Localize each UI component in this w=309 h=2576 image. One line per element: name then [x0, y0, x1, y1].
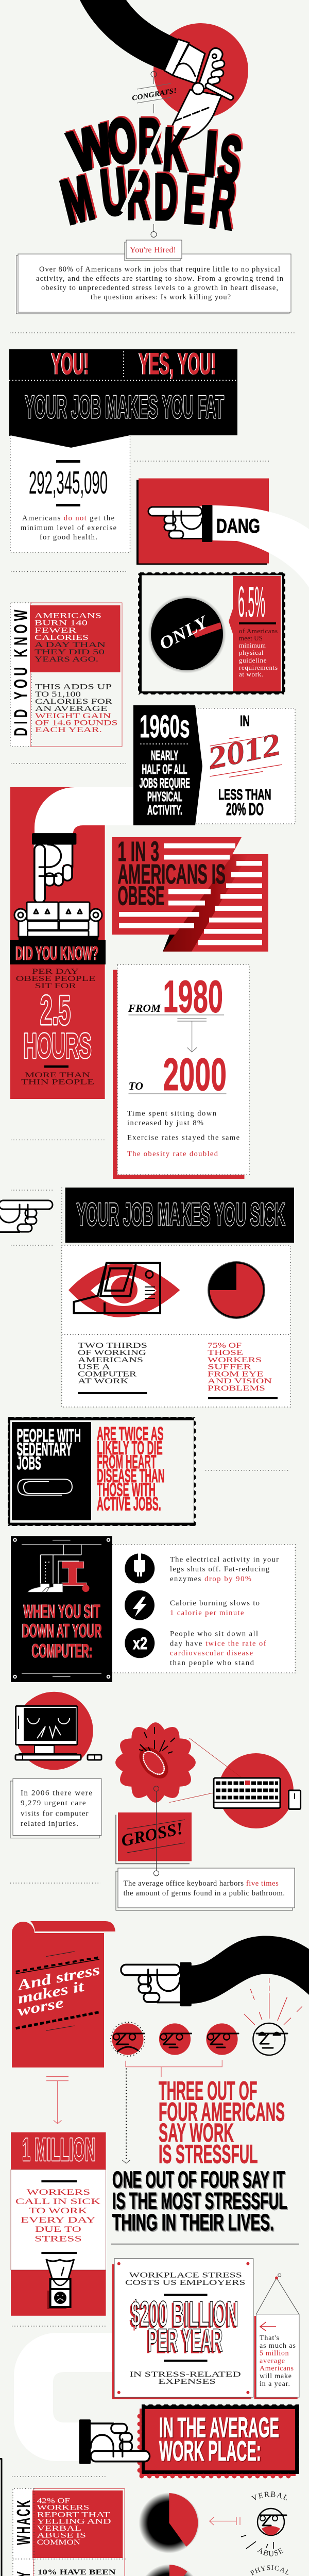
- panel: sitting red column with white pipe: OBESE PEOPLE: [16, 975, 96, 983]
- panel: 292,345,090 statistic: minimum level of exercise: [21, 524, 116, 532]
- title: work is murder: O: [104, 105, 140, 177]
- icon: keyboard and mouse: [214, 1778, 301, 1809]
- panel: sitting red column with white pipe: HOURS: [24, 1026, 92, 1065]
- stamp: only 6.5%: of Americans: [239, 627, 278, 635]
- stamp: only 6.5%: [137, 571, 286, 696]
- stamp: sedentary jobs: LIKELY TO DIE: [97, 1437, 163, 1459]
- title: work is murder: E: [182, 162, 207, 238]
- stamp: sedentary jobs: [6, 1415, 196, 1528]
- title: work is murder: D: [154, 161, 177, 233]
- hanging tag: 5 million americans: as much as: [260, 2342, 296, 2350]
- panel: whack and crazy: [13, 2488, 126, 2576]
- panel: did you know calories: AN AVERAGE: [35, 705, 108, 713]
- pie chart: physical violence 10 percent: [146, 2565, 288, 2576]
- panel: sitting red column with white pipe: DID YOU KNOW?: [16, 943, 99, 964]
- flag panel: 1 in 3 americans is obese: 1 IN 3: [117, 836, 159, 867]
- panel: sleeping computer injuries: In 2006 there were: [21, 1789, 92, 1797]
- panel: 1 million workers: STRESS: [35, 2235, 82, 2243]
- icon: times two: x2: [133, 1634, 147, 1653]
- heading: three out of four: [159, 2076, 285, 2169]
- panel: and stress makes it worse: [12, 1921, 115, 2067]
- panel: 1 million workers: [11, 2077, 106, 2316]
- panel: did you know calories: THEY DID 50: [35, 648, 105, 656]
- title: work is murder: R: [127, 158, 149, 233]
- panel: sleeping computer injuries: [10, 1692, 101, 1838]
- panel: 1980 to 2000: TO: [129, 1080, 143, 1092]
- panel: did you know calories: DID YOU KNOW: [11, 609, 31, 736]
- panel: computers and eye problems: PROBLEMS: [208, 1384, 265, 1393]
- panel: whack and crazy: COMMON: [37, 2538, 81, 2547]
- heading: three out of four: SAY WORK: [159, 2118, 234, 2147]
- panel: computers and eye problems: 75% OF: [208, 1342, 242, 1350]
- hanging tag: 5 million americans: will make: [260, 2372, 291, 2380]
- panel: 1960s vs 2012: 20% DO: [226, 800, 264, 819]
- panel: computers and eye problems: USE A: [78, 1363, 111, 1371]
- panel: and stress makes it worse: makes it: [16, 1978, 86, 2007]
- icon: hand pointing right: [79, 2419, 150, 2464]
- title: work is murder: R: [206, 165, 239, 244]
- title: work is murder: S: [214, 123, 245, 197]
- panel: did you know calories: AMERICANS: [35, 612, 101, 620]
- hanging tag: 5 million americans: That's: [260, 2334, 279, 2342]
- hanging tag: 5 million americans: in a year.: [260, 2380, 290, 2388]
- stamp: only 6.5%: meet US: [239, 634, 263, 642]
- panel: did you know calories: A DAY THAN: [35, 641, 106, 649]
- title: work is murder: S: [215, 122, 247, 196]
- stamp: only 6.5%: requirements: [239, 664, 278, 671]
- panel: 292,345,090 statistic: 292,345,090: [29, 465, 108, 501]
- hero illustration: arm, hand and knife: [80, 0, 248, 140]
- pie chart: verbal abuse 42 percent: [139, 2492, 287, 2556]
- panel: 1960s vs 2012: 2012: [204, 727, 284, 776]
- icon: tissue box: [46, 2260, 74, 2309]
- panel: when you sit down: DOWN AT YOUR: [22, 1620, 102, 1641]
- hanging tag: 5 million americans: Americans: [260, 2365, 294, 2372]
- pie chart: 75 percent: [208, 1261, 265, 1319]
- panel: gross callout: The average office keyboard harbors five times: [124, 1879, 279, 1888]
- illustration: arm pointing at stressed faces: [111, 1936, 309, 2163]
- panel: when you sit down: cardiovascular disease: [170, 1649, 253, 1657]
- flag panel: 1 in 3 americans is obese: [112, 836, 268, 952]
- panel: did you know calories: BURN 140: [35, 619, 88, 628]
- panel: computers and eye problems: AND VISION: [208, 1377, 272, 1385]
- title: work is murder: [55, 104, 247, 244]
- white pipe background: [14, 2333, 124, 2461]
- panel: 1 million workers: WORKERS: [27, 2188, 90, 2197]
- panel: 1960s vs 2012: [133, 705, 295, 825]
- title: work is murder: K: [163, 114, 191, 182]
- panel: 1 million workers: 1 MILLION: [22, 2132, 95, 2168]
- panel: 1980 to 2000: Time spent sitting down: [127, 1110, 217, 1118]
- panel: 1980 to 2000: The obesity rate doubled: [127, 1150, 218, 1158]
- icon: times two: [125, 1628, 154, 1658]
- title: work is murder: R: [140, 105, 162, 175]
- congrats tag and connector: [131, 71, 177, 237]
- intro text box: Over 80% of Americans work in jobs that require little to no physical: [39, 265, 280, 274]
- panel: did you know calories: OF 14.6 POUNDS: [35, 719, 117, 727]
- intro text box: You're Hired!: [130, 246, 176, 255]
- stamp: in the average work place: [79, 2403, 301, 2476]
- stamp: sedentary jobs: FROM HEART: [97, 1451, 157, 1472]
- panel: 1980 to 2000: increased by just 8%: [127, 1119, 203, 1127]
- title: work is murder: U: [99, 154, 131, 228]
- panel: $200 billion per year: COSTS US EMPLOYERS: [125, 2279, 245, 2287]
- title: work is murder: K: [162, 115, 189, 183]
- panel: sitting red column with white pipe: 2.5: [40, 987, 71, 1033]
- panel: computers and eye problems: THOSE: [208, 1349, 243, 1357]
- panel: did you know calories: THIS ADDS UP: [35, 683, 112, 691]
- stamp: sedentary jobs: JOBS: [16, 1453, 41, 1473]
- icon: paperclip: [18, 1479, 72, 1495]
- panel: $200 billion per year: WORKPLACE STRESS: [129, 2272, 242, 2280]
- panel: gross callout: [116, 1786, 295, 1910]
- icon: couch: [14, 902, 102, 941]
- germ blob and keyboard: [115, 1722, 301, 1828]
- stamp: sedentary jobs: ARE TWICE AS: [97, 1423, 164, 1445]
- panel: computers and eye problems: AT WORK: [78, 1377, 129, 1385]
- intro text box: obesity to unprecedented stress levels to a growth in heart disease,: [41, 284, 278, 292]
- panel: did you know calories: YEARS AGO.: [35, 655, 98, 664]
- panel: when you sit down: People who sit down all: [170, 1630, 258, 1638]
- icon: plug: [125, 1552, 154, 1583]
- panel: when you sit down: Calorie burning slows to: [170, 1599, 260, 1607]
- title: work is murder: M: [57, 161, 101, 235]
- panel: sitting red column with white pipe: DID YOU KNOW?: [15, 943, 98, 964]
- intro text box: activity, and the effects are starting to show. From a growing trend in: [36, 275, 284, 283]
- panel: computers and eye problems: AMERICANS: [78, 1356, 143, 1364]
- panel: when you sit down: 1 calorie per minute: [170, 1609, 244, 1617]
- stamp: sedentary jobs: ACTIVE JOBS.: [97, 1493, 161, 1515]
- panel: when you sit down: than people who stand: [170, 1659, 254, 1667]
- hanging tag: 5 million americans: [254, 2274, 299, 2399]
- icon: germ: [133, 1727, 175, 1784]
- header banner: your job makes you fat: YES, YOU!: [139, 347, 216, 381]
- panel: sitting red column with white pipe: MORE THAN: [25, 1071, 91, 1079]
- panel: when you sit down: DOWN AT YOUR: [22, 1620, 101, 1641]
- panel: and stress makes it worse: worse: [16, 1994, 65, 2020]
- panel: sitting red column with white pipe: PER DAY: [32, 968, 79, 976]
- title: work is murder: W: [63, 112, 119, 184]
- panel: whack and crazy: YELLING AND: [37, 2518, 111, 2526]
- banner: your job makes you sick: [0, 1188, 294, 1407]
- panel: dang pointing hand: DANG: [216, 515, 260, 537]
- panel: 1960s vs 2012: NEARLY: [151, 748, 178, 763]
- pie chart: verbal abuse 42 percent: ABUSE: [257, 2548, 283, 2556]
- panel: 1 million workers: EVERY DAY: [21, 2216, 96, 2225]
- panel: did you know calories: CALORIES FOR: [35, 698, 112, 706]
- panel: 1 million workers: CALL IN SICK: [15, 2197, 101, 2206]
- panel: $200 billion per year: [112, 2259, 253, 2399]
- panel: computers and eye problems: TWO THIRDS: [78, 1342, 147, 1350]
- intro text box: [16, 240, 291, 314]
- title: work is murder: R: [128, 156, 151, 231]
- panel: computers and eye problems: WORKERS: [208, 1356, 262, 1364]
- panel: when you sit down: WHEN YOU SIT: [24, 1601, 100, 1622]
- panel: sleeping computer injuries: 9,279 urgent care: [21, 1799, 86, 1807]
- heading: one out of four: [111, 2166, 299, 2244]
- panel: 1980 to 2000: FROM: [128, 1002, 161, 1014]
- panel: when you sit down: COMPUTER:: [31, 1640, 92, 1662]
- stamp: sedentary jobs: PEOPLE WITH: [16, 1426, 81, 1446]
- stamp: only 6.5%: at work.: [239, 670, 263, 678]
- panel: did you know calories: [10, 603, 122, 747]
- panel: 1960s vs 2012: JOBS REQUIRE: [139, 775, 190, 790]
- panel: sleeping computer injuries: visits for computer: [21, 1809, 89, 1818]
- title: work is murder: I: [203, 117, 221, 188]
- title: work is murder: M: [55, 163, 100, 237]
- title: work is murder: I: [202, 119, 219, 190]
- hanging tag: 5 million americans: 5 million: [260, 2350, 289, 2358]
- panel: 1960s vs 2012: PHYSICAL: [147, 789, 182, 804]
- title: work is murder: R: [138, 107, 161, 177]
- title: work is murder: R: [208, 163, 241, 243]
- panel: did you know calories: FEWER: [35, 626, 77, 635]
- panel: gross callout: GROSS!: [119, 1819, 185, 1851]
- panel: whack and crazy: REPORT THAT: [37, 2511, 110, 2519]
- panel: when you sit down: legs shuts off. Fat-reducing: [170, 1565, 269, 1573]
- panel: 1980 to 2000: [113, 964, 249, 1179]
- title: work is murder: U: [97, 156, 130, 229]
- panel: sitting red column with white pipe: SIT FOR: [35, 982, 76, 990]
- panel: sleeping computer injuries: related injuries.: [21, 1820, 78, 1828]
- header banner: your job makes you fat: YES, YOU!: [138, 347, 215, 381]
- panel: 1980 to 2000: 1980: [163, 971, 223, 1022]
- panel: 292,345,090 statistic: Americans do not get the: [22, 514, 114, 522]
- title: work is murder: E: [183, 161, 209, 236]
- panel: 1960s vs 2012: 1960s: [140, 709, 190, 744]
- title: work is murder: O: [106, 104, 141, 176]
- panel: sitting red column with white pipe: THIN PEOPLE: [21, 1078, 94, 1086]
- congrats tag and connector: CONGRATS!: [131, 87, 177, 103]
- panel: whack and crazy: WHACK: [14, 2500, 35, 2545]
- title: work is murder: W: [64, 110, 121, 182]
- panel: 1960s vs 2012: HALF OF ALL: [142, 761, 187, 777]
- flag panel: 1 in 3 americans is obese: OBESE: [117, 882, 165, 911]
- panel: did you know calories: EACH YEAR.: [35, 726, 102, 734]
- header banner: your job makes you fat: [9, 347, 237, 448]
- panel: computers and eye problems: OF WORKING: [78, 1349, 147, 1357]
- panel: $200 billion per year: IN STRESS-RELATED: [129, 2370, 241, 2379]
- panel: 1 million workers: TO WORK: [29, 2207, 88, 2215]
- icon: legs on office chair: [28, 1545, 90, 1592]
- panel: computers and eye problems: [62, 1245, 290, 1407]
- panel: when you sit down: day have twice the rate of: [170, 1639, 266, 1648]
- stamp: sedentary jobs: THOSE WITH: [97, 1479, 156, 1500]
- panel: computers and eye problems: SUFFER: [208, 1363, 252, 1371]
- panel: did you know calories: WEIGHT GAIN: [35, 712, 111, 720]
- stamp: sedentary jobs: SEDENTARY: [16, 1439, 72, 1460]
- panel: 1980 to 2000: Exercise rates stayed the same: [127, 1133, 239, 1142]
- rope, hand and white band: [0, 2459, 145, 2576]
- panel: whack and crazy: WORKERS: [37, 2504, 89, 2512]
- stamp: only 6.5%: ONLY: [156, 612, 212, 654]
- header banner: your job makes you fat: YOU!: [50, 347, 89, 381]
- panel: $200 billion per year: EXPENSES: [158, 2378, 216, 2386]
- icon: four faces: [111, 2022, 287, 2056]
- panel: whack and crazy: VERBAL: [37, 2524, 81, 2533]
- panel: 1960s vs 2012: LESS THAN: [218, 787, 271, 803]
- panel: did you know calories: CALORIES: [35, 634, 89, 642]
- panel: $200 billion per year: PER YEAR: [148, 2323, 222, 2359]
- panel: 1980 to 2000: 2000: [163, 1048, 227, 1100]
- panel: computers and eye problems: COMPUTER: [78, 1370, 136, 1379]
- panel: when you sit down: COMPUTER:: [32, 1640, 93, 1662]
- panel: when you sit down: WHEN YOU SIT: [23, 1601, 100, 1622]
- icon: lightning bolt: [125, 1590, 154, 1620]
- stamp: sedentary jobs: DISEASE THAN: [97, 1465, 165, 1486]
- icon: hand pointing down: [32, 833, 76, 903]
- panel: 292,345,090 statistic: [10, 435, 130, 552]
- icon: eye and computer: [68, 1263, 180, 1317]
- stamp: only 6.5%: minimum: [239, 641, 266, 649]
- panel: 1960s vs 2012: IN: [240, 713, 250, 730]
- panel: when you sit down: enzymes drop by 90%: [170, 1575, 251, 1583]
- panel: and stress makes it worse: And stress: [15, 1962, 101, 1994]
- panel: $200 billion per year: PER YEAR: [146, 2324, 221, 2360]
- hanging tag: 5 million americans: average: [260, 2358, 285, 2365]
- panel: when you sit down: The electrical activity in your: [170, 1555, 279, 1564]
- title: work is murder: D: [156, 159, 179, 231]
- panel: computers and eye problems: FROM EYE: [208, 1370, 264, 1379]
- pie chart: verbal abuse 42 percent: VERBAL: [251, 2492, 287, 2501]
- panel: 1 million workers: DUE TO: [35, 2225, 81, 2234]
- stamp: only 6.5%: guideline: [239, 656, 267, 664]
- panel: did you know calories: TO 51,100: [35, 690, 81, 699]
- panel: 1960s vs 2012: ACTIVITY.: [147, 802, 182, 818]
- panel: 292,345,090 statistic: for good health.: [40, 533, 97, 541]
- panel: when you sit down: [11, 1536, 295, 1682]
- intro text box: the question arises: Is work killing you?: [91, 293, 231, 301]
- panel: sitting red column with white pipe: [10, 787, 133, 1099]
- header banner: your job makes you fat: YOU!: [52, 347, 89, 381]
- panel: gross callout: the amount of germs found in a public bathroom.: [124, 1889, 285, 1897]
- panel: dang pointing hand: [136, 478, 309, 587]
- stamp: only 6.5%: physical: [239, 649, 264, 656]
- panel: whack and crazy: 42% OF: [37, 2497, 70, 2505]
- panel: whack and crazy: ABUSE IS: [37, 2532, 86, 2540]
